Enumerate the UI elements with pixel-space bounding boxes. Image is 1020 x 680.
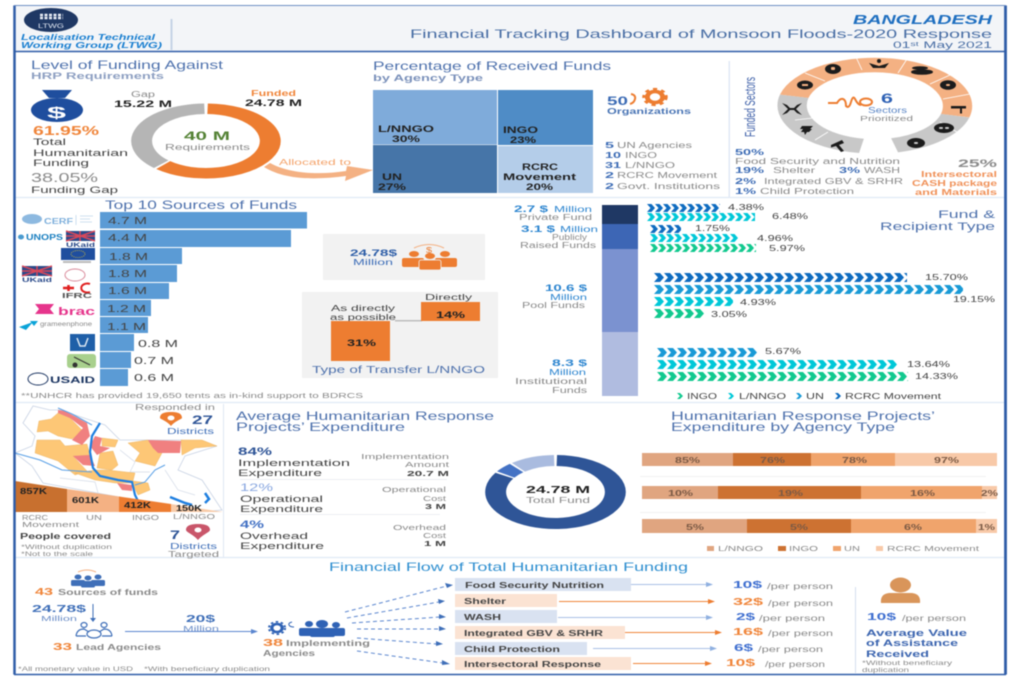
funnel: people covered: 412K — [124, 501, 151, 510]
panel: financial flow — [18, 560, 967, 674]
donor logos: USAID — [50, 375, 96, 385]
average assistance callout — [862, 578, 967, 674]
footnote: UNHCR: **UNHCR has provided 19,650 tents as in-kind support to BDRCS — [21, 393, 364, 400]
sector percentages list: 19% — [735, 166, 764, 175]
stat: districts targeted: Targeted — [168, 550, 219, 559]
label: gap — [114, 90, 172, 109]
arrow: allocated to: Allocated to — [279, 158, 352, 167]
sector row: intersectoral response: /per person — [765, 660, 825, 669]
card: type of transfer: 31% — [347, 338, 376, 348]
stat: funding gap: 38.05% — [31, 170, 99, 185]
radial sector ring: 6 — [881, 90, 893, 106]
dashed arrows to sectors — [345, 583, 453, 665]
sector icons — [782, 59, 966, 152]
stacked bars: agency expenditure: 16% — [910, 489, 935, 498]
intersectoral callout: 25% — [958, 158, 997, 170]
average assistance callout: /per person — [902, 614, 966, 623]
average assistance callout: duplication — [862, 668, 909, 674]
legend: recipients — [677, 392, 942, 401]
stat: districts responded: Districts — [167, 427, 214, 436]
heading: received funds — [373, 59, 611, 83]
labels: fund types: Million — [550, 293, 587, 302]
heading: funded sectors vertical: Funded Sectors — [742, 77, 759, 137]
labels: fund types: 3.1 $ — [521, 224, 555, 234]
stacked bars: agency expenditure: 1% — [978, 523, 995, 532]
legend: recipients: RCRC Movement — [845, 392, 942, 401]
stacked bars: agency expenditure: 5% — [686, 523, 704, 532]
stat: implementation — [238, 446, 449, 478]
panel: average expenditure — [236, 409, 615, 551]
header band — [14, 6, 1006, 51]
stage: implementing agencies: 38 — [263, 638, 284, 649]
treemap: agency type: INGO — [503, 125, 538, 135]
stat: operational: Cost — [423, 496, 446, 503]
stat: districts targeted: Districts — [170, 542, 217, 551]
average assistance callout: Received — [866, 649, 929, 659]
panel: top 10 sources of funds — [18, 198, 364, 400]
panel: fund and recipient type — [514, 203, 996, 401]
heading: received funds: Percentage of Received Funds — [373, 59, 611, 73]
sector row: shelter: 32$ — [733, 597, 764, 608]
stat: implementation: Amount — [405, 462, 449, 469]
sector percentages list: 1% — [735, 187, 756, 196]
donut chart: total fund — [496, 460, 615, 523]
stat: operational: 12% — [240, 482, 273, 494]
stacked bars: agency expenditure: 2% — [981, 489, 998, 498]
organizations breakdown list: L/NNGO — [625, 161, 675, 170]
heading: average expenditure — [236, 409, 494, 434]
stacked bars: agency expenditure: 85% — [675, 456, 700, 465]
stat: operational: Operational — [382, 487, 447, 494]
chevron bars: recipients — [647, 204, 963, 381]
organizations breakdown list: 31 — [605, 161, 622, 170]
sector row: intersectoral response — [455, 657, 825, 670]
heading: level of funding: Level of Funding Against — [31, 58, 224, 72]
sector percentages list: Child Protection — [760, 187, 854, 196]
flow value: 24.78 million: 24.78$ — [32, 604, 87, 615]
organizations breakdown list: 10 — [605, 151, 622, 160]
labels: fund types: Funds — [552, 386, 587, 395]
stage: sources of funds: 43 — [35, 587, 54, 598]
average assistance callout: 10$ — [867, 612, 897, 623]
flow value: 20 million: Million — [183, 626, 219, 633]
labels: fund types: Million — [554, 205, 592, 214]
percent labels: recipients: 15.70% — [925, 273, 968, 282]
sector row: child protection: /per person — [758, 645, 823, 654]
heading: top 10: Top 10 Sources of Funds — [105, 198, 297, 212]
percent labels: recipients — [695, 203, 995, 381]
logo: LTWG — [21, 8, 163, 50]
bar chart: sources: 1.6 M — [108, 286, 147, 297]
percent labels: recipients: 3.05% — [711, 310, 747, 319]
sector row: shelter: /per person — [768, 599, 833, 608]
heading: fund and recipient — [880, 209, 996, 233]
donut chart: total fund: 24.78 M — [526, 485, 590, 496]
stat: overhead: Overhead — [240, 531, 308, 541]
sector row: child protection: 6$ — [734, 643, 754, 654]
labels: fund types: 10.6 $ — [545, 283, 587, 293]
bar chart: sources: 1.2 M — [107, 304, 146, 315]
labels: fund types: Million — [549, 368, 586, 377]
stage: lead agencies: 33 — [53, 642, 73, 653]
panel: funded sectors — [735, 57, 998, 197]
panel: percentage of received funds — [373, 59, 720, 193]
section dividers — [15, 198, 1004, 558]
intersectoral callout: Intersectoral — [921, 170, 997, 179]
treemap: agency type — [373, 90, 593, 193]
card: type of transfer — [302, 292, 498, 378]
sector row: child protection — [455, 642, 823, 655]
sector percentages list: WASH — [864, 166, 900, 175]
stage: lead agencies: Lead Agencies — [76, 643, 162, 652]
labels: fund types: Institutional — [515, 377, 587, 386]
donor logos: UKaid — [66, 243, 96, 249]
heading: average expenditure: Average Humanitarian Response — [236, 409, 494, 423]
stage: sources of funds: Sources of funds — [58, 588, 159, 597]
intersectoral callout: and Materials — [915, 188, 998, 197]
legend: agency expenditure: RCRC Movement — [887, 546, 979, 553]
sector percentages list — [735, 148, 903, 196]
sector row: intersectoral response: 10$ — [726, 658, 756, 669]
flow value: 24.78 million — [32, 604, 96, 623]
labels: fund types: Publicly — [552, 233, 587, 242]
funnel: people covered: L/NNGO — [173, 514, 216, 521]
treemap: agency type: 23% — [510, 135, 536, 145]
intersectoral callout — [912, 158, 998, 197]
pulse line — [828, 98, 861, 107]
sector percentages list: Food Security and Nutrition — [735, 157, 900, 166]
sector row: food security: 10$ — [733, 580, 763, 591]
stat: overhead: Cost — [423, 533, 446, 540]
stat: implementation: Implementation — [238, 458, 350, 468]
percent labels: recipients: 4.93% — [740, 298, 776, 307]
heading: fund and recipient: Recipient Type — [880, 221, 995, 233]
donor logos: UNOPS — [26, 233, 64, 242]
stat: funded percentage: Humanitarian — [33, 148, 128, 158]
sector row: wash: /per person — [759, 614, 825, 623]
labels: fund types: Private Fund — [519, 213, 592, 222]
map: Bangladesh districts — [15, 406, 222, 512]
organizations breakdown list: 2 — [605, 171, 615, 180]
heading: average expenditure: Projects’ Expenditure — [236, 420, 405, 434]
icon: money bag — [31, 90, 83, 122]
organizations count: Organizations — [607, 107, 692, 116]
labels: fund types — [514, 204, 598, 395]
percent labels: recipients: 5.67% — [765, 347, 801, 356]
card: type of transfer: 14% — [436, 310, 465, 320]
sector row: wash: 2$ — [736, 612, 756, 623]
panel: level of funding — [31, 58, 373, 195]
heading: received funds: by Agency Type — [373, 73, 483, 83]
label: funded — [245, 89, 302, 108]
donor logos: IFRC — [62, 293, 92, 300]
stat: operational: 3 M — [425, 504, 446, 511]
card: total funds: 24.78$ — [350, 248, 397, 258]
treemap: agency type: RCRC — [522, 162, 559, 172]
stat: funded percentage: Funding — [33, 158, 89, 168]
sector row: shelter — [455, 594, 833, 608]
stat: implementation: Expenditure — [238, 468, 322, 478]
legend: agency expenditure: INGO — [789, 546, 819, 553]
icon: people with coin: $ — [426, 246, 433, 255]
stacked bars: agency expenditure: 19% — [778, 489, 803, 498]
sector percentages list: 3% — [839, 166, 860, 175]
heading: expenditure by agency: Humanitarian Response Projects’ — [671, 409, 935, 423]
organizations count — [607, 89, 692, 116]
sector row: wash: WASH — [464, 613, 501, 622]
funnel: people covered — [15, 481, 223, 529]
labels: fund types: Raised Funds — [520, 241, 596, 250]
sector row: GBV and SRHR — [455, 626, 833, 639]
sector row: child protection: Child Protection — [464, 645, 560, 654]
stage: sources of funds — [35, 570, 159, 598]
stage: implementing agencies — [263, 620, 370, 658]
legend: recipients: INGO — [687, 392, 717, 401]
label: funded: 24.78 M — [245, 98, 302, 108]
card: type of transfer: Type of Transfer L/NNGO — [312, 365, 485, 376]
panel: map and coverage — [15, 403, 223, 559]
organizations breakdown list: Govt. Institutions — [617, 182, 720, 191]
sector row: intersectoral response: Intersectoral Response — [464, 660, 602, 669]
label: people covered: *Without duplication — [21, 545, 112, 551]
percent labels: recipients: 4.38% — [728, 203, 764, 212]
funnel: people covered: UN — [86, 515, 102, 522]
stat: districts responded: Responded in — [135, 403, 215, 412]
legend: agency expenditure: UN — [844, 546, 860, 553]
bar chart: sources: 4.4 M — [108, 233, 147, 244]
stat: overhead: 1 M — [424, 541, 446, 548]
donut chart: funding against requirements: 40 M — [184, 129, 230, 143]
treemap: agency type: L/NNGO — [378, 124, 434, 134]
donut chart: funding against requirements: Requirements — [165, 143, 250, 152]
card: total funds: Million — [353, 258, 393, 267]
legend: agency expenditure — [707, 546, 979, 553]
label: funded: Funded — [251, 89, 296, 98]
stacked bars: agency expenditure: 78% — [842, 456, 867, 465]
radial sector ring — [782, 57, 970, 152]
percent labels: recipients: 4.96% — [757, 234, 793, 243]
percent labels: recipients: 14.33% — [915, 372, 958, 381]
legend: agency expenditure: L/NNGO — [718, 546, 764, 553]
treemap: agency type: UN — [382, 172, 402, 182]
label: gap: 15.22 M — [114, 99, 172, 109]
average assistance callout: Average Value — [866, 628, 967, 638]
treemap: agency type: 30% — [392, 134, 420, 144]
header title block: Financial Tracking Dashboard of Monsoon Floods-2020 Response — [410, 27, 993, 41]
donor logos: brac — [58, 306, 95, 318]
treemap: agency type: 20% — [526, 182, 553, 192]
radial sector ring: Sectors — [868, 106, 907, 115]
heading: level of funding: HRP Requirements — [31, 71, 164, 81]
card: type of transfer: as possible — [330, 313, 397, 322]
heading: expenditure by agency — [671, 409, 935, 434]
stat: districts targeted — [168, 524, 219, 559]
bar chart: sources — [100, 212, 307, 386]
organizations breakdown list: INGO — [625, 151, 657, 160]
stat: operational: Expenditure — [240, 504, 323, 514]
icon: people with coin — [402, 244, 457, 270]
percent labels: recipients: 5.97% — [769, 244, 805, 253]
labels: fund types: 2.7 $ — [514, 204, 548, 214]
icon: person — [881, 578, 920, 603]
sector row: shelter: Shelter — [464, 597, 506, 606]
heading: level of funding — [31, 58, 224, 81]
bar chart: sources: 4.7 M — [108, 216, 147, 227]
stacked bars: agency expenditure: 6% — [904, 523, 922, 532]
footnotes: flow: *With beneficiary duplication — [144, 667, 270, 673]
stat: funded percentage — [33, 123, 128, 168]
footnotes: flow — [18, 667, 270, 673]
stage: implementing agencies: Implementing — [286, 639, 370, 648]
stat: funding gap: Funding Gap — [31, 185, 118, 195]
donor logos: grameenphone — [40, 322, 93, 328]
flow value: 20 million — [125, 614, 258, 634]
donor logos: UKaid — [22, 278, 53, 284]
percent labels: recipients: 19.15% — [953, 295, 995, 304]
funnel: people covered: 857K — [20, 487, 47, 496]
donut chart: funding against requirements — [142, 109, 270, 173]
stat: implementation: Implementation — [361, 454, 449, 461]
sector row: GBV and SRHR: 16$ — [733, 627, 764, 638]
footnotes: flow: *All monetary value in USD — [18, 667, 134, 673]
average assistance callout: *Without beneficiary — [862, 661, 952, 667]
heading: fund and recipient: Fund & — [938, 209, 996, 221]
sector row: food security: Food Security Nutrition — [465, 581, 604, 590]
bar chart: sources: 1.8 M — [109, 252, 148, 263]
stat: funded percentage: 61.95% — [33, 123, 100, 138]
stage: lead agencies — [53, 622, 162, 653]
intersectoral callout: CASH package — [912, 179, 998, 188]
stacked bars: agency expenditure — [642, 453, 998, 533]
organizations breakdown list: RCRC Movement — [617, 171, 718, 180]
organizations breakdown list: 2 — [605, 182, 615, 191]
stacked bars: agency expenditure: 97% — [934, 456, 959, 465]
stat: overhead: Overhead — [393, 525, 446, 532]
sector row: GBV and SRHR: /per person — [768, 629, 833, 638]
labels: fund types: Million — [560, 225, 598, 234]
sector percentages list: Shelter — [773, 166, 816, 175]
treemap: agency type: Movement — [503, 172, 576, 182]
stat: implementation: 84% — [238, 446, 272, 458]
flow value: 24.78 million: Million — [41, 616, 77, 623]
percent labels: recipients: 13.64% — [907, 360, 950, 369]
stat: districts targeted: 7 — [170, 528, 180, 542]
header title block: 01ˢᵗ May 2021 — [893, 40, 992, 50]
stat: funding gap — [31, 170, 118, 195]
treemap: agency type: 27% — [378, 182, 406, 192]
stat: overhead — [240, 519, 446, 551]
header title block — [410, 12, 993, 50]
organizations breakdown list: UN Agencies — [617, 141, 692, 150]
stacked bar: fund types — [602, 205, 638, 396]
bar chart: sources: 0.8 M — [138, 339, 178, 350]
heading: expenditure by agency: Expenditure by Agency Type — [671, 420, 895, 434]
organizations breakdown list — [605, 141, 720, 191]
card: type of transfer: Directly — [425, 293, 472, 302]
organizations count: 50 — [607, 94, 628, 108]
stat: districts responded: 27 — [192, 413, 213, 427]
label: people covered — [20, 532, 112, 558]
legend: recipients: L/NNGO — [739, 392, 786, 401]
funnel: people covered: INGO — [132, 515, 160, 522]
stacked bars: agency expenditure: 5% — [790, 523, 808, 532]
labels: fund types: Pool Funds — [522, 301, 585, 310]
bar chart: sources: 1.8 M — [108, 269, 147, 280]
percent labels: recipients: 6.48% — [772, 212, 808, 221]
flow value: 20 million: 20$ — [186, 614, 216, 625]
funnel: people covered: Movement — [22, 522, 79, 529]
stacked bars: agency expenditure: 10% — [668, 489, 693, 498]
label: people covered: People covered — [20, 532, 111, 541]
bar chart: sources: 1.1 M — [107, 322, 146, 333]
radial sector ring: Prioritized — [860, 116, 913, 123]
stat: implementation: 20.7 M — [407, 471, 449, 478]
header title block: BANGLADESH — [853, 12, 993, 27]
stacked bars: agency expenditure: 76% — [760, 456, 785, 465]
percent labels: recipients: 1.75% — [695, 224, 730, 233]
logo: LTWG: Localisation Technical — [21, 33, 156, 42]
sector row: food security: /per person — [767, 582, 833, 591]
legend: recipients: UN — [806, 392, 824, 401]
sector percentages list: 50% — [735, 148, 764, 157]
average assistance callout: of Assistance — [866, 638, 958, 648]
stat: funded percentage: Total — [33, 137, 66, 147]
stat: districts responded — [135, 403, 215, 436]
sector percentages list: Integrated GBV & SRHR — [764, 177, 903, 186]
organizations breakdown list: 5 — [605, 141, 615, 150]
sector row: GBV and SRHR: Integrated GBV & SRHR — [464, 629, 603, 638]
panel: expenditure by agency type — [640, 409, 998, 553]
labels: fund types: 8.3 $ — [552, 358, 587, 368]
stat: overhead: Expenditure — [240, 541, 324, 551]
stat: overhead: 4% — [240, 519, 264, 531]
sector row: wash — [455, 610, 825, 623]
stage: implementing agencies: Agencies — [263, 649, 316, 658]
heading: financial flow: Financial Flow of Total Humanitarian Funding — [329, 560, 688, 574]
funnel: people covered: RCRC — [22, 515, 48, 522]
funnel: people covered: 601K — [72, 496, 99, 505]
arrow: allocated to — [264, 158, 373, 181]
donut chart: total fund: Total Fund — [526, 496, 590, 505]
card: total funds — [323, 234, 485, 280]
stat: operational — [240, 482, 447, 514]
bar chart: sources: 0.6 M — [134, 373, 174, 384]
label: gap: Gap — [131, 90, 156, 99]
icon: money bag: $ — [47, 105, 66, 122]
donor logos: CERF — [44, 217, 73, 226]
sector row: food security — [455, 578, 833, 591]
card: type of transfer: As directly — [331, 304, 395, 313]
stat: operational: Operational — [240, 494, 323, 504]
label: people covered: *Not to the scale — [21, 552, 94, 558]
logo: LTWG: LTWG — [38, 24, 65, 30]
sector percentages list: 2% — [735, 177, 756, 186]
bar chart: sources: 0.7 M — [134, 356, 174, 367]
logo: LTWG: Working Group (LTWG) — [21, 41, 163, 50]
funnel: people covered: 150K — [176, 504, 202, 513]
donor logos — [18, 214, 96, 385]
